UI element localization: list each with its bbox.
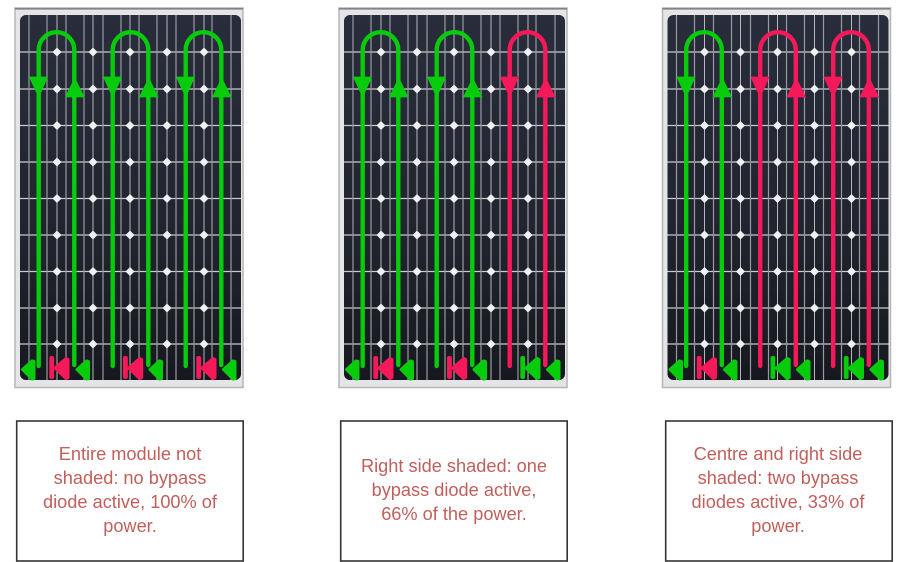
caption text: power. [103,516,157,536]
panel: entire module not shaded [15,8,243,388]
bypass diode 2: inactive red [447,356,466,379]
caption box: one bypass diode active [341,421,567,561]
caption box: two bypass diodes active [666,421,892,561]
solar module background [662,8,890,388]
bypass diode 1: inactive red [697,356,716,379]
panel: centre and right side shaded [662,8,890,388]
caption text: shaded: two bypass [698,468,858,488]
caption text: Entire module not [59,444,201,464]
terminal arrows [22,361,235,379]
caption text: Right side shaded: one [361,456,547,476]
caption text: bypass diode active, [372,480,536,500]
current loop 1: green [677,32,732,366]
current loop 3: red [824,32,878,366]
current loop 1: green [354,32,408,366]
caption text: diodes active, 33% of [692,492,865,512]
current loop 3: green [176,32,231,366]
caption box: no bypass diode active [17,421,243,561]
bypass diode 2: active green [770,356,789,379]
terminal arrows [346,361,559,379]
solar module background [339,8,567,388]
bypass diode 3: active green [520,356,539,379]
caption text: power. [751,516,805,536]
panel: right side shaded [339,8,567,388]
caption text: Centre and right side [694,444,862,464]
caption text: shaded: no bypass [54,468,206,488]
bypass diode 1: inactive red [49,356,68,379]
caption text: diode active, 100% of [43,492,218,512]
current loop 2: green [104,32,158,366]
current loop 1: green [30,32,84,366]
current loop 3: red [500,32,555,366]
bypass diode 3: active green [844,356,862,379]
bypass diode 3: inactive red [196,356,215,379]
bypass diode 1: inactive red [373,356,392,379]
caption text: 66% of the power. [381,504,527,524]
current loop 2: green [428,32,482,366]
terminal arrows [670,361,882,379]
current loop 2: red [751,32,806,366]
solar module background [15,8,243,388]
bypass diode 2: inactive red [123,356,142,379]
